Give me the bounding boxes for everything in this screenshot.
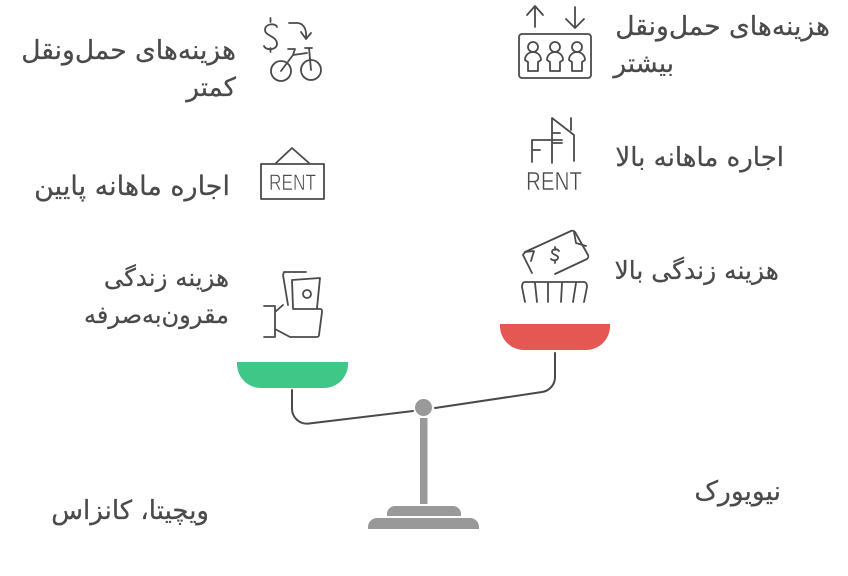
label: high monthly rent: اجاره ماهانه بالا <box>615 143 784 173</box>
label: higher transport costs: هزینه‌های حمل‌ونقل <box>615 11 830 42</box>
scale: beam <box>292 353 555 424</box>
icon: hand holding money <box>264 272 322 337</box>
label: lower transport costs: کمتر <box>184 73 237 103</box>
label: higher transport costs: بیشتر <box>612 49 674 79</box>
label: high cost of living: هزینه زندگی بالا <box>614 256 779 285</box>
icon: money and basket <box>522 231 588 302</box>
label: lower transport costs <box>21 35 237 103</box>
icon: rent building <box>526 118 582 196</box>
label: Wichita, Kansas: ویچیتا، کانزاس <box>51 496 209 526</box>
label: affordable cost of living <box>84 263 229 329</box>
icon: rent building: RENT <box>526 166 582 196</box>
label: New York: نیویورک <box>694 476 781 507</box>
icon: rent sign: RENT <box>269 170 316 195</box>
label: higher transport costs <box>612 11 830 79</box>
scale: stand and base <box>368 418 479 529</box>
label: affordable cost of living: هزینه زندگی <box>104 263 229 292</box>
pan: red <box>500 324 610 350</box>
scale: pivot <box>415 399 432 416</box>
icon: dollar and bicycle <box>264 18 321 81</box>
icon: people with arrows <box>519 6 591 78</box>
label: lower transport costs: هزینه‌های حمل‌ونقل <box>21 35 236 66</box>
icon: rent sign <box>261 148 324 199</box>
label: affordable cost of living: مقرون‌به‌صرفه <box>84 301 229 329</box>
pan: green <box>237 362 348 388</box>
label: low monthly rent: اجاره ماهانه پایین <box>34 171 230 202</box>
